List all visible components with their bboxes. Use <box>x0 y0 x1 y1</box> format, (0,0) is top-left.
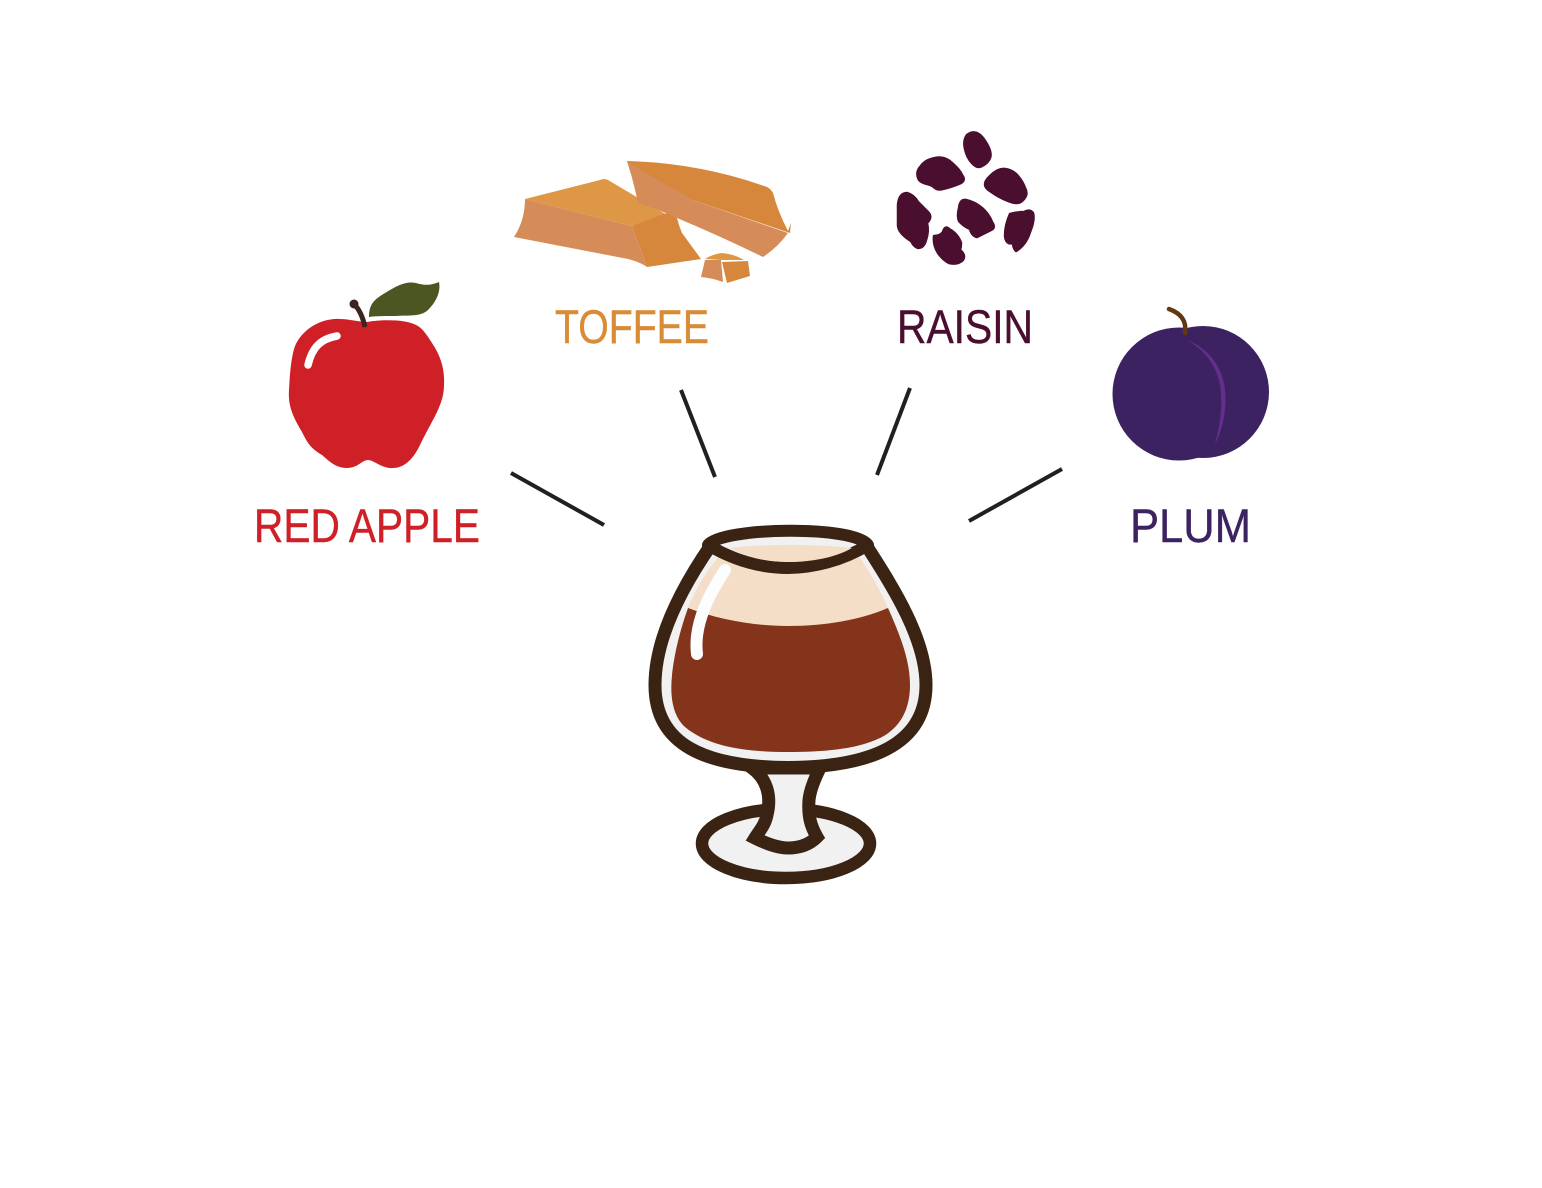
icon: toffee pieces <box>514 161 791 283</box>
rim foam <box>730 545 852 562</box>
icon: plum <box>1112 309 1269 460</box>
liquid <box>671 608 910 752</box>
highlight <box>696 570 725 654</box>
label: plum: PLUM <box>1130 499 1251 552</box>
glass foot <box>702 809 870 878</box>
icon: snifter glass <box>655 531 926 878</box>
label: raisin: RAISIN <box>897 300 1033 353</box>
arrow lines: glass to flavour notes <box>511 388 1062 525</box>
icon: red apple <box>289 282 444 468</box>
icon: raisins <box>898 132 1034 264</box>
label: toffee: TOFFEE <box>555 300 709 353</box>
rim <box>708 531 868 568</box>
glass stem <box>752 768 820 848</box>
foam <box>688 555 888 632</box>
glass bowl <box>655 545 926 768</box>
label: red apple: RED APPLE <box>254 499 480 552</box>
